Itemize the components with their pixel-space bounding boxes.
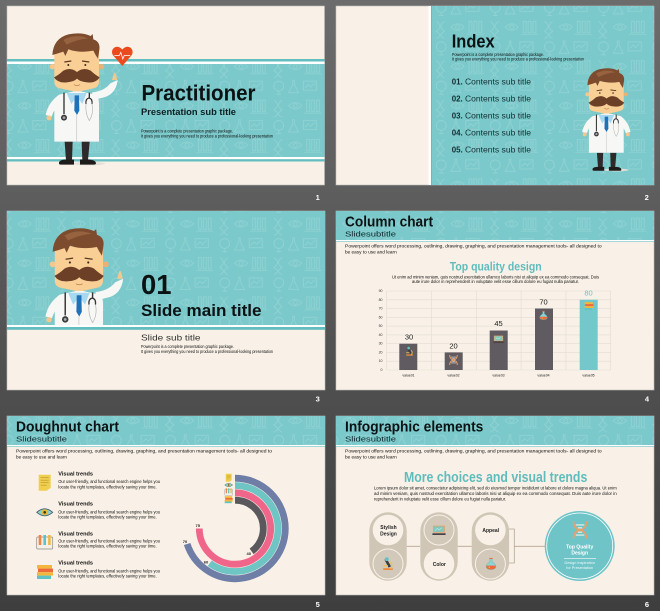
section subtitle: Slide sub title <box>141 333 201 343</box>
subtitle: Presentation sub title <box>141 107 236 117</box>
intro text: Powerpoint offers word processing, outlining, drawing, graphing, and presentation management tools- all designed to <box>345 449 603 454</box>
section title: Slide main title <box>141 302 262 320</box>
contents list: 03. <box>452 111 463 120</box>
category labels: value03 <box>492 373 505 377</box>
chart caption: aute irure dolor in reprehenderit in voluptate velit esse cillum dolore eu fugiat nulla pariatur. <box>412 279 579 284</box>
pill: stylish design: Design <box>380 531 397 537</box>
list item: books: Our user-friendly, and functional search engine helps you <box>58 568 160 573</box>
panel: slide 4 column chart <box>336 211 654 390</box>
result circle <box>545 511 615 581</box>
category labels <box>402 373 595 377</box>
section body: Lorem ipsum dolor sit amet, consectetur adipisicing elit, sed do eiusmod tempor incididunt ut labore et dolore magna aliqua. Ut enim <box>374 486 617 491</box>
result circle: Design Inspiration <box>564 561 595 565</box>
contents list: 01. <box>452 77 463 86</box>
subheading: Slidesubtitle <box>345 435 396 444</box>
intro text: be easy to use and learn <box>16 455 68 460</box>
subheading: Slidesubtitle <box>16 435 67 444</box>
contents list: Contents sub title <box>465 128 532 137</box>
y axis labels: 40 <box>379 333 383 337</box>
ring values <box>183 523 252 564</box>
y axis labels: 30 <box>379 342 383 346</box>
y axis labels: 50 <box>379 324 383 328</box>
list item: test tubes: Our user-friendly, and functional search engine helps you <box>58 539 160 544</box>
doctor illustration: bust <box>46 228 124 325</box>
pill: color: Color <box>433 562 446 568</box>
contents list: Contents sub title <box>465 145 532 154</box>
list item: eye: Visual trends <box>58 502 93 508</box>
chart caption: Ut enim ad minim veniam, quis nostrud exercitation ullamco laboris nisi ut aliquip ex ea commodo consequat. Duis <box>392 274 599 279</box>
subheading: Slidesubtitle <box>345 230 396 239</box>
doctor illustration: standing <box>582 68 630 171</box>
heading: Infographic elements <box>345 419 483 436</box>
pill: appeal <box>472 512 509 581</box>
slide number 4: 4 <box>645 394 650 404</box>
y axis labels: 20 <box>379 350 383 354</box>
list item: books: locate the right templates, effectively saving your time. <box>58 573 157 578</box>
heading: Column chart <box>345 214 433 231</box>
panel: slide 2 index <box>336 6 654 185</box>
y axis labels: 60 <box>379 315 383 319</box>
description: It gives you everything you need to produce a professional-looking presentation <box>141 349 274 354</box>
section body: ad minim veniam, quis nostrud exercitation ullamco laboris nisi ut aliquip ex ea commodo consequat. Duis aute irure dolor in <box>374 491 617 496</box>
ring values: 75 <box>195 523 201 528</box>
description: It gives you everything you need to produce a professional-looking presentation <box>141 133 274 138</box>
connectors <box>407 529 545 563</box>
category labels: value04 <box>537 373 550 377</box>
intro text: be easy to use and learn <box>345 455 398 460</box>
list item: eye: locate the right templates, effectively saving your time. <box>58 514 157 519</box>
value labels: 30 <box>405 333 413 342</box>
heading: Index <box>452 32 495 52</box>
value labels: 20 <box>449 342 458 350</box>
y axis labels: 0 <box>381 368 383 372</box>
contents list: Contents sub title <box>465 111 532 120</box>
title: Practitioner <box>142 80 256 106</box>
list item: note: Our user-friendly, and functional search engine helps you <box>58 479 160 484</box>
intro text: be easy to use and learn <box>345 250 398 255</box>
section number: 01 <box>141 269 172 300</box>
description: Powerpoint is a complete presentation graphic package. <box>141 344 234 349</box>
panel: slide 6 infographic elements <box>336 416 654 595</box>
ring values: 40 <box>246 551 252 556</box>
contents list <box>452 77 532 154</box>
description: It gives you everything you need to produce a professional-looking presentation <box>452 57 585 62</box>
pill: appeal: Appeal <box>482 528 500 534</box>
category labels: value02 <box>447 373 460 377</box>
value labels: 70 <box>539 298 548 306</box>
result circle: Design <box>571 551 588 557</box>
list item: note: Visual trends <box>58 472 93 478</box>
list item: books: Visual trends <box>58 561 93 567</box>
category labels: value05 <box>582 373 595 377</box>
contents list: Contents sub title <box>465 77 532 86</box>
result circle: for Presentation <box>566 566 593 570</box>
ring values: 70 <box>183 539 188 544</box>
section title: More choices and visual trends <box>404 470 587 486</box>
ring icons <box>225 474 233 503</box>
bar icons <box>406 302 593 365</box>
intro text: Powerpoint offers word processing, outlining, drawing, graphing, and presentation management tools- all designed to <box>345 244 603 249</box>
y axis labels: 10 <box>379 359 383 363</box>
contents list: 05. <box>452 145 463 154</box>
contents list: Contents sub title <box>465 94 532 103</box>
intro text: Powerpoint offers word processing, outlining, drawing, graphing, and presentation management tools- all designed to <box>16 449 273 454</box>
category labels: value01 <box>402 373 415 377</box>
y axis labels: 70 <box>379 307 383 311</box>
panel: slide 1 cover <box>7 6 324 185</box>
bars <box>399 300 598 370</box>
y axis labels <box>379 289 383 372</box>
value labels: 45 <box>494 319 503 328</box>
contents list: 02. <box>452 94 463 103</box>
list item: note <box>39 472 160 491</box>
list item: eye <box>37 502 160 519</box>
y axis labels: 80 <box>379 298 383 302</box>
doctor illustration: pointing <box>46 33 118 165</box>
list item: note: locate the right templates, effectively saving your time. <box>58 484 157 489</box>
doughnut chart <box>183 474 285 579</box>
description: Powerpoint is a complete presentation graphic package. <box>452 52 544 57</box>
value labels: 80 <box>584 288 593 298</box>
list item: eye: Our user-friendly, and functional search engine helps you <box>58 509 160 514</box>
pill: color <box>420 512 458 581</box>
ring values: 60 <box>204 560 209 564</box>
slide number 5: 5 <box>316 600 320 609</box>
y axis labels: 90 <box>379 289 383 293</box>
value labels <box>405 288 593 350</box>
slide number 3: 3 <box>316 394 320 404</box>
icon: heart with pulse <box>112 47 133 66</box>
slide number 2: 2 <box>645 193 649 202</box>
heading: Doughnut chart <box>16 419 119 436</box>
slide number 1: 1 <box>316 193 320 202</box>
contents list: 04. <box>452 128 463 137</box>
list item: test tubes: Visual trends <box>58 531 93 537</box>
list item: test tubes <box>37 531 160 549</box>
pill: stylish design: Stylish <box>380 525 397 531</box>
list item: books <box>37 561 160 579</box>
result circle: Top Quality <box>566 545 593 551</box>
section body: reprehenderit in voluptate velit esse cillum dolore eu fugiat nulla pariatur. <box>374 497 506 502</box>
panel: slide 3 section <box>7 211 325 390</box>
description: Powerpoint is a complete presentation graphic package. <box>141 128 233 133</box>
column chart <box>379 288 611 377</box>
slide number 6: 6 <box>645 600 649 609</box>
pill: stylish design <box>369 512 407 581</box>
panel: slide 5 doughnut chart <box>7 416 325 595</box>
list item: test tubes: locate the right templates, effectively saving your time. <box>58 544 157 549</box>
chart title: Top quality design <box>450 261 542 273</box>
